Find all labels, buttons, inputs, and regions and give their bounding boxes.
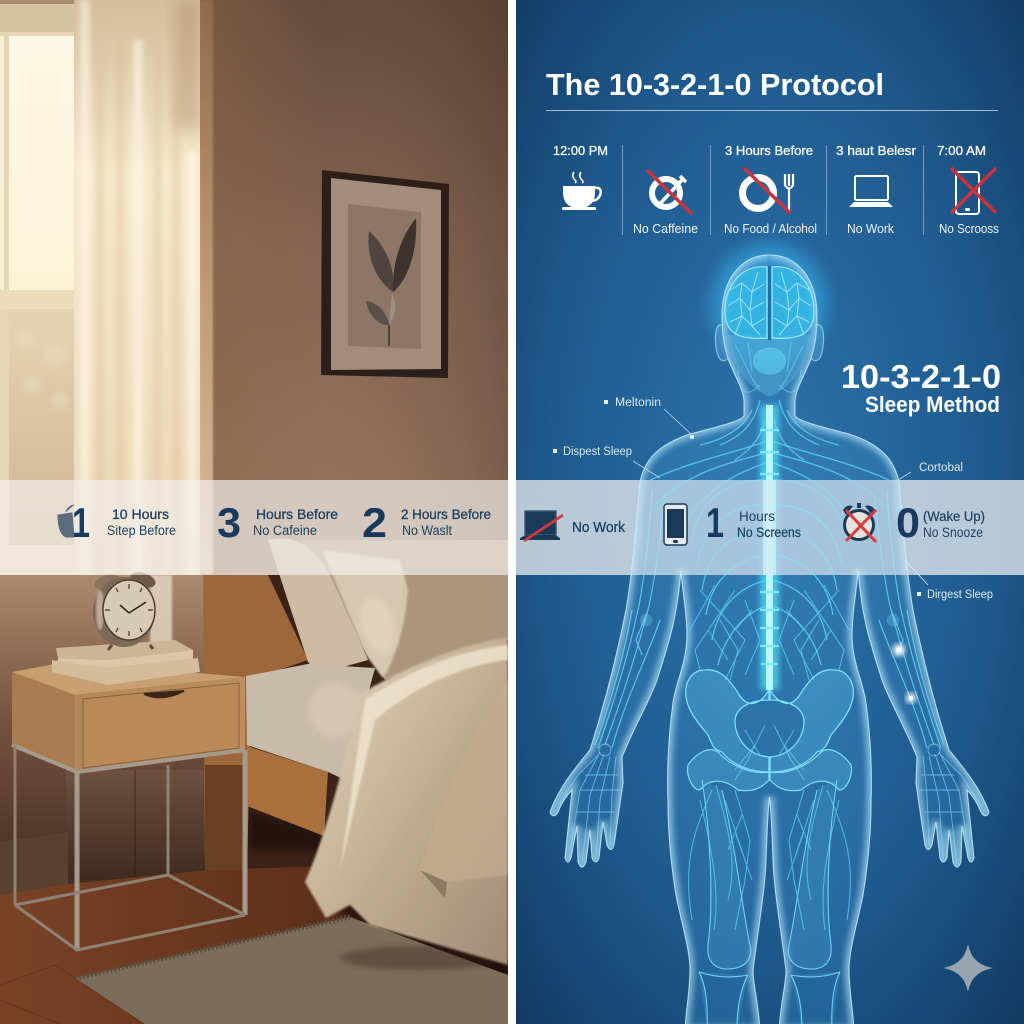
neck nerves bbox=[700, 400, 765, 460]
no work label: No Work bbox=[572, 520, 626, 536]
rug fringe bbox=[75, 917, 350, 978]
step 1: 1 bbox=[72, 499, 90, 546]
heading: sleep method bbox=[841, 358, 1001, 417]
heading: sleep method: 10-3-2-1-0 bbox=[841, 358, 1001, 395]
hazy foliage bbox=[26, 349, 66, 406]
icon: crossed laptop bbox=[520, 511, 563, 541]
baseboard bbox=[0, 832, 68, 895]
callout: Dispest Sleep bbox=[553, 446, 660, 478]
step 1: Sitep Before bbox=[107, 523, 176, 538]
blanket fold bbox=[436, 681, 508, 882]
floor shadow bbox=[249, 810, 507, 974]
body fill bbox=[550, 255, 770, 1024]
brain centre gap bbox=[768, 266, 771, 340]
bed post shadow bbox=[205, 765, 242, 870]
floor rug bbox=[75, 917, 508, 1024]
step 0: (Wake Up) bbox=[923, 509, 985, 524]
wood floor bbox=[0, 866, 358, 1024]
panel: bedroom photo scene bbox=[0, 0, 508, 1024]
curtain folds bbox=[134, 770, 136, 868]
timeline headings: 12:00 PM bbox=[553, 143, 608, 158]
front pillow bbox=[322, 550, 408, 678]
vertebrae bbox=[760, 430, 779, 664]
band figure, right half bbox=[770, 255, 989, 1024]
icon: crossed phone bbox=[951, 168, 996, 214]
band figure, left half bbox=[550, 255, 770, 1024]
spinal cord bbox=[766, 405, 773, 690]
wrist bbox=[599, 744, 611, 756]
step 1 hour: Hours bbox=[739, 509, 775, 524]
step 1 hour: 1 bbox=[706, 499, 724, 546]
step 1 hour bbox=[706, 499, 801, 546]
panel: blue anatomy background bbox=[516, 0, 1024, 1024]
blanket hem shadow bbox=[420, 870, 447, 898]
wall light falloff bbox=[212, 0, 508, 480]
arm light spots bbox=[893, 644, 916, 703]
rug shadow bbox=[340, 946, 500, 970]
heading: sleep method: Sleep Method bbox=[865, 392, 1000, 417]
callout: Dispest Sleep: Dispest Sleep bbox=[563, 446, 632, 458]
callout: Dirgest Sleep: Dirgest Sleep bbox=[927, 589, 993, 601]
title: The 10-3-2-1-0 Protocol bbox=[546, 67, 884, 102]
arm nerve node bbox=[640, 614, 652, 626]
step 1 hour: No Screens bbox=[737, 525, 801, 540]
inner edge glow bbox=[550, 255, 770, 1024]
timeline captions bbox=[633, 221, 999, 236]
title rule bbox=[546, 110, 998, 111]
timeline captions: No Caffeine bbox=[633, 221, 698, 236]
callout: Cortobal bbox=[895, 462, 963, 482]
mattress highlight bbox=[310, 684, 356, 736]
blanket upper sheen bbox=[340, 645, 508, 870]
pelvic nerves bbox=[735, 725, 765, 780]
icon: no caffeine, crossed plate bbox=[647, 170, 692, 214]
window bbox=[0, 0, 80, 580]
bed headboard and post bbox=[203, 575, 308, 870]
step 0 bbox=[896, 499, 985, 546]
step 2: 2 bbox=[362, 499, 387, 546]
figure showing through right band bbox=[550, 255, 989, 1024]
step 0: 0 bbox=[896, 499, 920, 546]
thigh veins bbox=[689, 785, 752, 930]
shin bbox=[699, 972, 748, 1024]
icon: crossed alarm clock bbox=[843, 503, 876, 542]
nasal glow bbox=[754, 348, 786, 374]
framed leaf artwork bbox=[321, 170, 449, 378]
step 0: No Snooze bbox=[923, 525, 983, 540]
timeline row bbox=[553, 143, 999, 236]
callout: Dirgest Sleep bbox=[905, 560, 993, 601]
icon: phone bbox=[664, 504, 687, 545]
timeline captions: No Work bbox=[847, 221, 894, 236]
step 1: 10 Hours bbox=[112, 507, 169, 522]
abdominal nerves bbox=[690, 585, 760, 680]
headboard pillow back bbox=[300, 540, 508, 680]
bedroom wall bbox=[206, 0, 508, 575]
translucent band, left bbox=[0, 480, 508, 575]
spinal glow bbox=[760, 405, 779, 690]
lower curtain bbox=[66, 770, 204, 785]
steps strip, left bbox=[58, 499, 491, 546]
steps strip, right bbox=[520, 499, 985, 546]
dividers bbox=[622, 145, 924, 235]
icon: no food, crossed plate and fork bbox=[742, 168, 793, 213]
lower wall bbox=[0, 575, 210, 895]
callout: Meltonin bbox=[604, 397, 694, 439]
back pillow bbox=[268, 538, 368, 674]
hip joint bbox=[688, 750, 769, 791]
band spine bbox=[763, 480, 776, 575]
mattress bbox=[246, 664, 375, 780]
timeline captions: No Food / Alcohol bbox=[724, 221, 817, 236]
step 1 bbox=[72, 499, 176, 546]
step 2: 2 Hours Before bbox=[401, 507, 491, 522]
mirrored half body, right bbox=[770, 255, 989, 1024]
translucent band, right bbox=[516, 480, 1024, 575]
head fill bbox=[728, 335, 770, 397]
scene backing bbox=[248, 575, 508, 869]
timeline headings bbox=[553, 143, 986, 158]
step 3: No Cafeine bbox=[253, 523, 317, 538]
light on lower wall bbox=[150, 575, 172, 645]
face nerves bbox=[735, 342, 760, 392]
brain folds bbox=[728, 272, 765, 335]
step 3: Hours Before bbox=[256, 507, 338, 522]
icon: laptop bbox=[849, 176, 893, 207]
ear bbox=[715, 325, 728, 361]
icon: coffee cup bbox=[562, 172, 601, 210]
arm bones and nerves bbox=[595, 490, 664, 748]
hand bones bbox=[558, 752, 620, 864]
timeline headings: 3 Hours Before bbox=[725, 143, 813, 158]
icon: cup beside numeral bbox=[58, 505, 74, 537]
brain lobe bbox=[725, 267, 767, 338]
floor plank seams bbox=[0, 965, 145, 1024]
timeline headings: 7:00 AM bbox=[937, 143, 986, 158]
body outline bbox=[550, 255, 770, 1024]
alarm clock bbox=[92, 569, 158, 650]
step 2 bbox=[362, 499, 491, 546]
icon: sparkle watermark bbox=[943, 944, 993, 992]
anatomy figure bbox=[550, 243, 989, 1024]
pillow highlight bbox=[363, 598, 393, 652]
callout: Cortobal: Cortobal bbox=[919, 462, 963, 474]
half body, left bbox=[550, 255, 770, 1024]
blanket bbox=[305, 637, 508, 965]
timeline captions: No Scrooss bbox=[939, 221, 999, 236]
step 3 bbox=[217, 499, 338, 546]
femur bbox=[702, 780, 751, 969]
step 2: No Waslt bbox=[402, 523, 452, 538]
nightstand bbox=[12, 662, 245, 950]
bed rail bbox=[247, 746, 328, 836]
step 3: 3 bbox=[217, 499, 241, 546]
pelvic wing bbox=[686, 670, 769, 772]
callout: Meltonin: Meltonin bbox=[615, 397, 661, 409]
head glow bbox=[711, 243, 827, 367]
shoulder and rib nerves bbox=[650, 440, 769, 665]
timeline headings: 3 haut Belesr bbox=[836, 143, 917, 158]
sheer curtain bbox=[74, 0, 213, 575]
books bbox=[52, 640, 200, 685]
